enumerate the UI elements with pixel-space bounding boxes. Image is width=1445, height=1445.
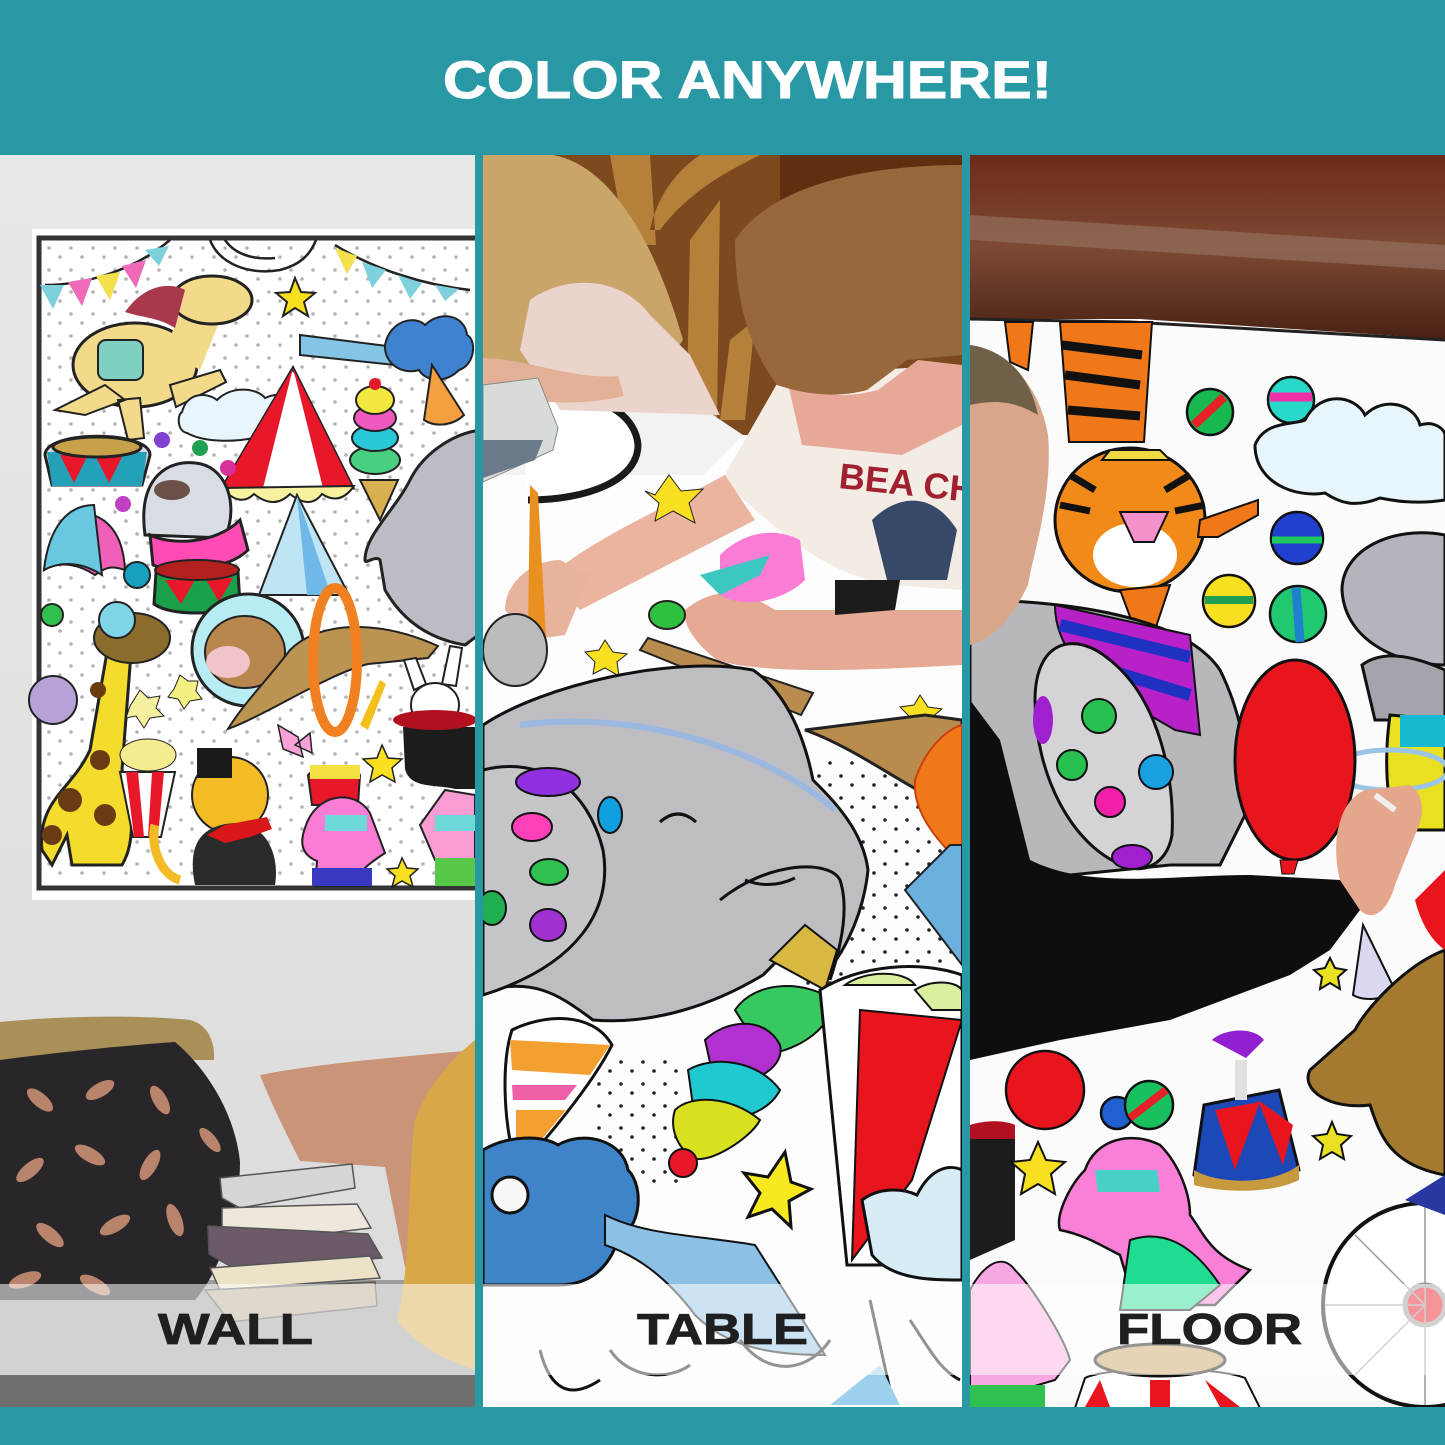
star (276, 278, 315, 316)
label band: table (483, 1284, 962, 1375)
umbrella (44, 514, 125, 575)
polka dot table print (806, 761, 952, 985)
ice cream (350, 378, 400, 520)
elephant large (478, 666, 868, 1021)
popcorn (120, 772, 175, 837)
label: table: TABLE (637, 1305, 808, 1354)
blue cloud (483, 1138, 638, 1285)
table colourings (483, 475, 942, 731)
basket (0, 1017, 240, 1300)
mustard chair (397, 1040, 475, 1370)
party hat large (505, 1019, 612, 1170)
boy (505, 165, 962, 670)
blue ribbon and cloud (300, 335, 395, 365)
wood chairs background (553, 155, 962, 435)
cloud (1255, 399, 1445, 503)
lion on table (804, 714, 962, 790)
wood floor (970, 155, 1445, 340)
giraffe (42, 602, 170, 865)
panel: table (483, 155, 962, 1407)
red balloon (1235, 660, 1355, 874)
horse (55, 276, 252, 440)
pig walking (1059, 1138, 1250, 1310)
elephant body (970, 600, 1250, 885)
star large (744, 1152, 811, 1227)
elephant (365, 430, 485, 645)
crayon box (483, 378, 558, 482)
floor (0, 1280, 475, 1375)
label band: wall (0, 1284, 475, 1375)
pale cloud (862, 1168, 962, 1280)
top hat (970, 1130, 1015, 1260)
panel: wall (0, 155, 485, 1407)
cushion (260, 1050, 475, 1275)
small pedestal (1194, 1031, 1299, 1191)
small decorations (29, 432, 418, 887)
lion helmet (192, 594, 304, 706)
wall poster (29, 229, 485, 900)
header band (0, 0, 1445, 155)
pale blue ribbon (605, 1215, 825, 1355)
boy: BEA CHILL (837, 455, 1031, 516)
girl (483, 155, 720, 415)
top hat with rabbit (393, 646, 477, 789)
red tent stripe (820, 967, 962, 1265)
pedestal 1 (45, 436, 150, 485)
label: wall: WALL (158, 1305, 313, 1354)
man (970, 345, 1422, 1060)
party hat (424, 365, 464, 425)
poster edge (970, 319, 1445, 359)
seal (144, 463, 248, 613)
grey cloud (178, 388, 276, 442)
wheel (1323, 1175, 1445, 1407)
label: floor: FLOOR (1117, 1305, 1302, 1354)
title: COLOR ANYWHERE! (443, 51, 1052, 110)
cat (154, 748, 276, 885)
fire ring (313, 588, 357, 732)
pig (302, 797, 385, 886)
lower pig and pedestal (970, 1262, 1260, 1408)
panel: floor (970, 155, 1445, 1408)
hippo (1332, 533, 1445, 830)
party hat and bear (1308, 870, 1445, 1175)
stacked books (205, 1164, 382, 1322)
pig 2 (420, 790, 475, 886)
circus tent (222, 368, 353, 488)
blue tent (905, 845, 962, 965)
ice cream large (669, 925, 837, 1177)
stars (1011, 1142, 1065, 1194)
label band: floor (970, 1284, 1445, 1375)
bicycle wheel (520, 396, 638, 500)
table top (500, 412, 743, 475)
lower scribbles (540, 1300, 960, 1390)
balls (1006, 377, 1326, 1129)
tiger (1005, 322, 1258, 630)
footer band (0, 1407, 1445, 1445)
lion body (228, 627, 438, 729)
